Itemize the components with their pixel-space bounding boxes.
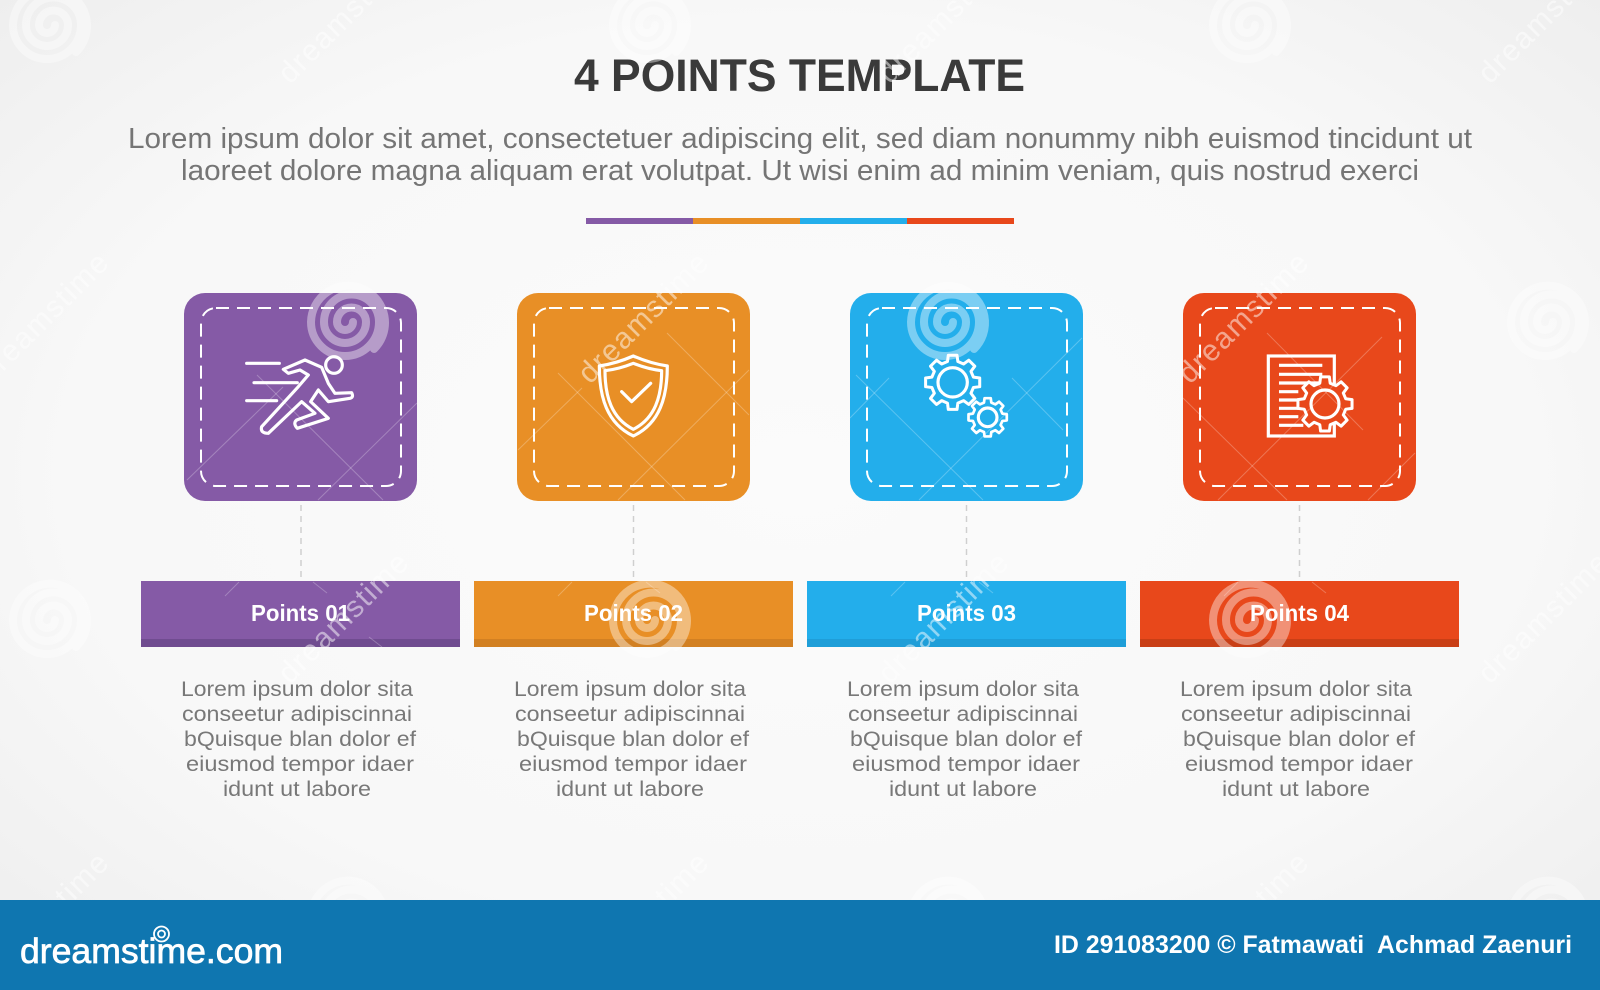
description: Lorem ipsum dolor sita [1180,678,1412,701]
description: conseetur adipiscinnai [515,703,745,726]
intro text [128,123,1472,187]
connector [632,505,634,578]
icon card purple [184,293,417,501]
description: idunt ut labore [223,778,371,801]
description: conseetur adipiscinnai [848,703,1078,726]
dashed frame [867,308,1067,486]
icon card orange [517,293,750,501]
label: Points 04 [1250,600,1349,626]
icon: shield with check [599,356,667,436]
description: Lorem ipsum dolor sita [181,678,413,701]
dashed frame [201,308,401,486]
intro text: laoreet dolore magna aliquam erat volutpat. Ut wisi enim ad minim veniam, quis nostrud exerci [181,155,1419,187]
icon: document with gear [1268,356,1352,436]
footer band [0,900,1600,990]
description: conseetur adipiscinnai [1181,703,1411,726]
description: eiusmod tempor idaer [1185,753,1413,776]
dashed frame [1200,308,1400,486]
description: bQuisque blan dolor ef [850,728,1082,751]
description: bQuisque blan dolor ef [184,728,416,751]
label: Points 03 [917,600,1016,626]
description: bQuisque blan dolor ef [517,728,749,751]
description [1180,678,1415,801]
description: conseetur adipiscinnai [182,703,412,726]
panel: point 01 [141,293,460,801]
panel: point 02 [474,293,793,801]
description: eiusmod tempor idaer [519,753,747,776]
label bar [141,581,460,647]
dashed frame [534,308,734,486]
connector [300,505,302,578]
watermark lines [187,333,1415,647]
intro text: Lorem ipsum dolor sit amet, consectetuer adipiscing elit, sed diam nonummy nibh euismod tincidunt ut [128,123,1472,155]
title: 4 POINTS TEMPLATE [574,50,1025,101]
description [514,678,749,801]
watermark text: dreamstime [1172,846,1315,990]
watermark text: dreamstime [572,846,715,990]
description: eiusmod tempor idaer [852,753,1080,776]
watermark text: dreamstime [1172,246,1315,390]
description: Lorem ipsum dolor sita [514,678,746,701]
panel: point 04 [1140,293,1459,801]
icon card blue [850,293,1083,501]
description: idunt ut labore [1222,778,1370,801]
description [181,678,416,801]
footer logo: dreamstime.com [20,932,283,971]
icon: two gears [926,355,1007,436]
description: idunt ut labore [889,778,1037,801]
watermark text: dreamstime [872,546,1015,690]
description: Lorem ipsum dolor sita [847,678,1079,701]
description: idunt ut labore [556,778,704,801]
label bar [807,581,1126,647]
label: Points 01 [251,600,350,626]
description [847,678,1082,801]
watermark text: dreamstime [572,246,715,390]
label: Points 02 [584,600,683,626]
icon: running person [247,357,353,433]
footer logo spiral [154,926,169,942]
label bar [474,581,793,647]
connector [1298,505,1300,578]
colour divider bar [586,218,1014,224]
watermark text: dreamstime [272,546,415,690]
footer credit: ID 291083200 © Fatmawati Achmad Zaenuri [1054,931,1572,959]
icon card red [1183,293,1416,501]
description: bQuisque blan dolor ef [1183,728,1415,751]
connector [966,505,968,578]
label bar [1140,581,1459,647]
panel: point 03 [807,293,1126,801]
description: eiusmod tempor idaer [186,753,414,776]
